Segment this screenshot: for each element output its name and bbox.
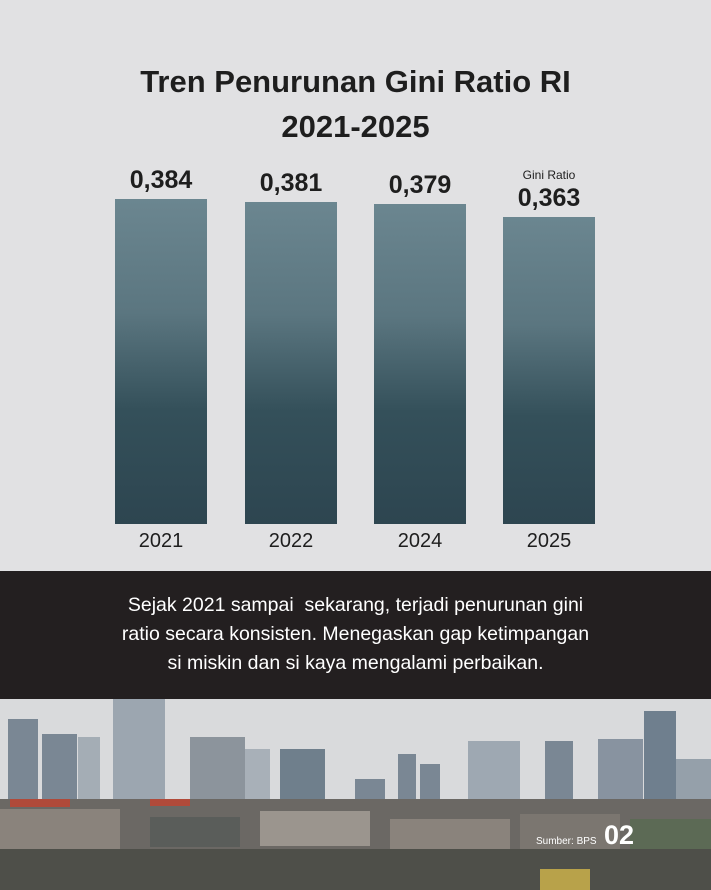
- value 2021: 0,384: [130, 166, 192, 194]
- text band: si miskin dan si kaya mengalami perbaikan.: [167, 652, 544, 674]
- text band: ratio secara konsisten. Menegaskan gap ketimpangan: [122, 623, 589, 645]
- label Gini Ratio: Gini Ratio: [523, 168, 575, 182]
- text band: [0, 571, 711, 699]
- page number: 02: [604, 820, 634, 850]
- year 2022: 2022: [269, 530, 313, 552]
- year 2021: 2021: [139, 530, 183, 552]
- value 2022: 0,381: [260, 169, 322, 197]
- bar 2021: [115, 199, 207, 524]
- bar 2025: [503, 217, 595, 524]
- title: Tren Penurunan Gini Ratio RI: [140, 64, 571, 99]
- bar 2022: [245, 202, 337, 524]
- title: 2021-2025: [281, 109, 430, 144]
- year 2025: 2025: [527, 530, 571, 552]
- value 2024: 0,379: [389, 171, 451, 199]
- title: [140, 64, 571, 144]
- year 2024: 2024: [398, 530, 442, 552]
- photo: city skyline: [0, 699, 711, 890]
- value 2025: 0,363: [518, 184, 580, 212]
- bar chart: [115, 166, 595, 552]
- bar 2024: [374, 204, 466, 524]
- source: Sumber: BPS: [536, 836, 597, 847]
- text band: Sejak 2021 sampai sekarang, terjadi penurunan gini: [128, 594, 583, 616]
